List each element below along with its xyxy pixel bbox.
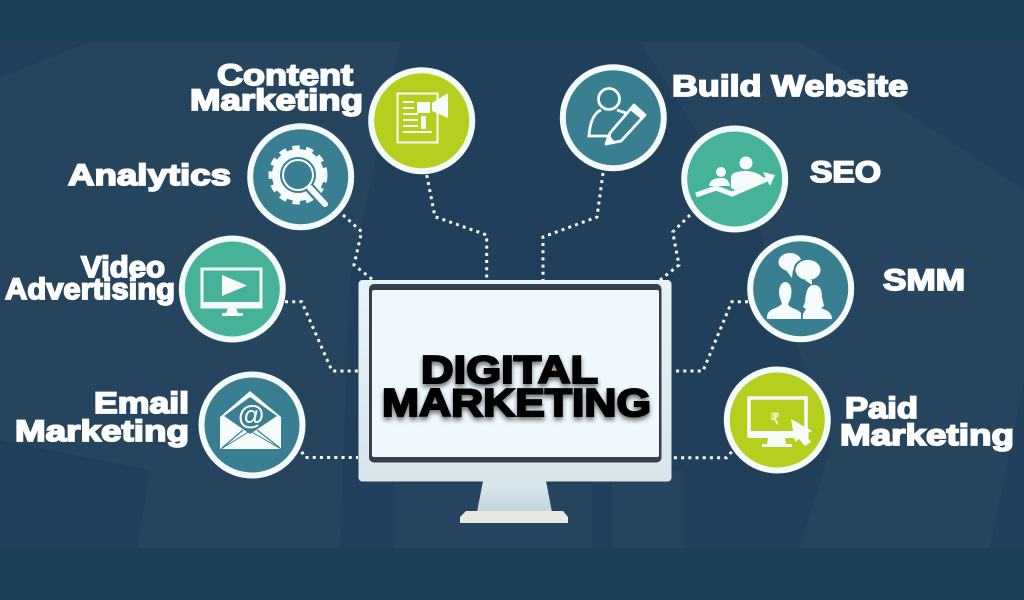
label: email marketing: Email: [94, 387, 189, 420]
connector: analytics: [343, 215, 373, 280]
label: SMM: SMM: [883, 264, 965, 297]
node: SMM: [750, 238, 851, 339]
label: paid marketing: Marketing: [840, 419, 1014, 452]
monitor bezel: [369, 284, 662, 462]
monitor heading: MARKETING: [382, 382, 651, 425]
icon: two people with speech bubbles: [767, 253, 832, 319]
label: content marketing: Content: [217, 59, 353, 92]
monitor screen: [372, 290, 659, 457]
node: SEO: [684, 128, 785, 230]
label: email marketing: [15, 387, 189, 448]
icon: gear with magnifier: [272, 149, 326, 206]
connector: paid marketing: [672, 452, 732, 458]
node: email marketing: [202, 374, 302, 476]
connector: email marketing: [302, 452, 358, 458]
monitor frame: [358, 280, 672, 482]
connector: content marketing: [427, 175, 487, 280]
node: analytics: [250, 126, 351, 227]
monitor: [358, 280, 672, 523]
monitor heading: [382, 349, 651, 425]
connector: SEO: [660, 215, 690, 280]
node: content marketing: [371, 70, 472, 171]
node: paid marketing: [727, 370, 828, 470]
icon: people on rising arrow: [696, 156, 775, 195]
connector: video advertising: [285, 302, 358, 371]
label: build website: Build Website: [672, 70, 908, 103]
node: build website: [563, 67, 664, 168]
label: paid marketing: [840, 392, 1014, 452]
label: video advertising: Video: [81, 251, 165, 284]
label: analytics: Analytics: [68, 159, 231, 192]
label: video advertising: [5, 251, 175, 306]
label: video advertising: Advertising: [5, 273, 175, 306]
connector: SMM: [672, 302, 748, 371]
label: paid marketing: Paid: [845, 392, 918, 425]
label: email marketing: Marketing: [15, 415, 189, 448]
label: content marketing: [190, 59, 363, 117]
monitor heading: DIGITAL: [421, 349, 598, 392]
label: SEO: SEO: [810, 156, 881, 189]
icon: screen with rupee and cursor: ₹: [770, 411, 780, 428]
label: content marketing: Marketing: [190, 84, 363, 117]
icon: user with pencil: [589, 88, 645, 144]
monitor stand: [477, 481, 552, 512]
node: video advertising: [182, 238, 283, 340]
icon: open envelope: @: [238, 400, 264, 430]
icon: document with megaphone: [398, 93, 448, 142]
monitor base: [460, 511, 568, 523]
icon: screen with play button: [200, 269, 262, 316]
connector: build website: [543, 173, 603, 280]
